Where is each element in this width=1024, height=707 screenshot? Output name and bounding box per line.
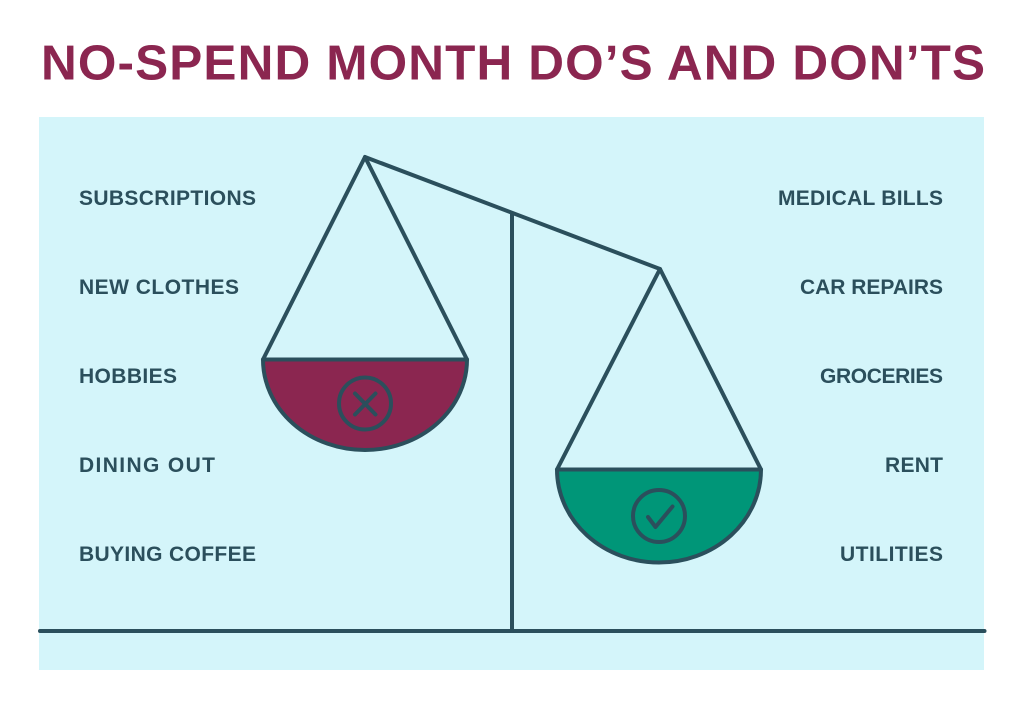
title: NO-SPEND MONTH DO’S AND DON’TS (41, 36, 985, 90)
scale pole (510, 213, 514, 631)
list: don'ts (79, 187, 256, 566)
list: don'ts: HOBBIES (79, 365, 177, 388)
list: don'ts: DINING OUT (79, 454, 215, 477)
list: do's (778, 187, 943, 566)
list: don'ts: SUBSCRIPTIONS (79, 187, 256, 210)
list: do's: CAR REPAIRS (800, 276, 943, 299)
list: do's: RENT (885, 454, 943, 477)
list: don'ts: NEW CLOTHES (79, 276, 239, 299)
list: don'ts: BUYING COFFEE (79, 543, 256, 566)
list: do's: GROCERIES (820, 365, 943, 388)
list: do's: MEDICAL BILLS (778, 187, 943, 210)
ground line (40, 629, 984, 633)
list: do's: UTILITIES (840, 543, 943, 566)
scale beam (365, 157, 660, 269)
icon: cross in circle (339, 378, 391, 430)
chart: balance scale (40, 157, 984, 631)
panel: background (39, 117, 984, 670)
icon: check in circle (633, 490, 685, 542)
right pan: do's (557, 269, 761, 562)
left pan: don'ts (263, 157, 467, 450)
